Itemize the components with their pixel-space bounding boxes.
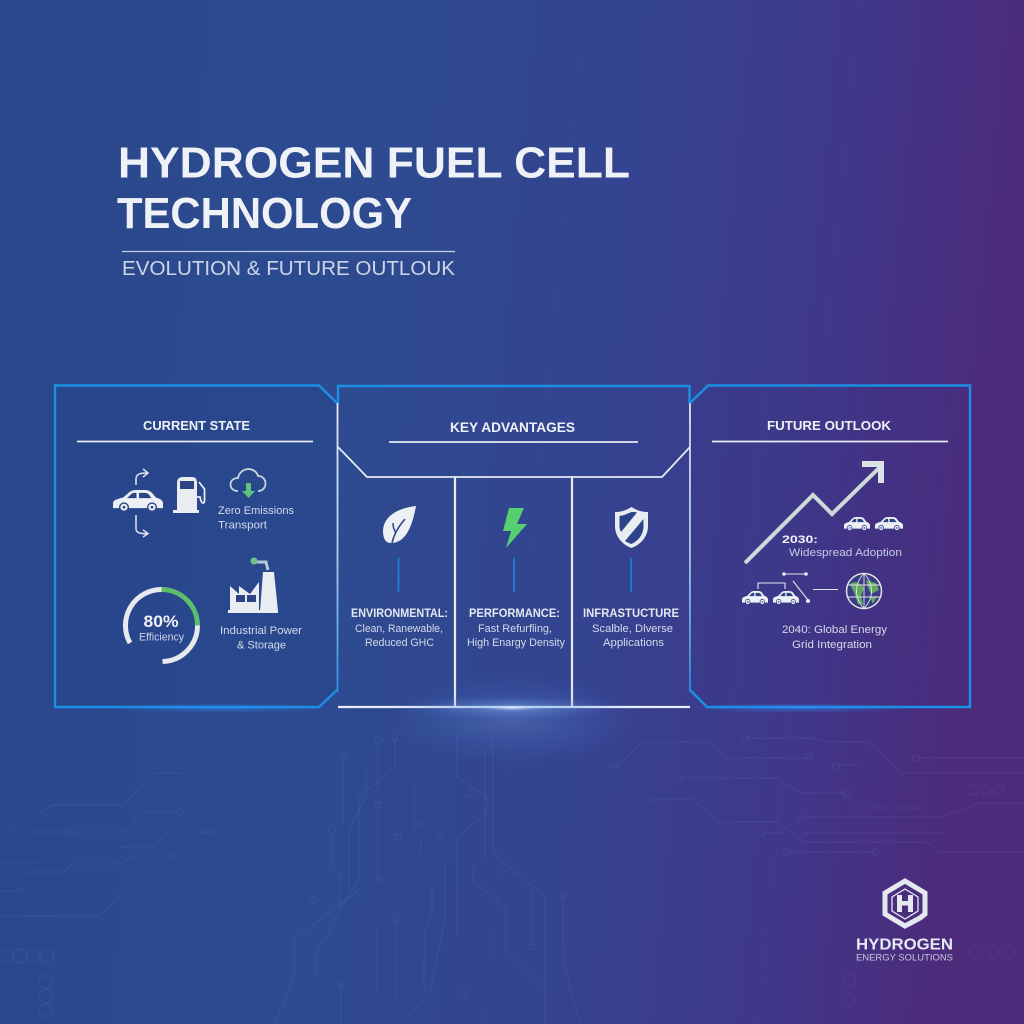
column: performance: Fast Refurfling, — [478, 623, 552, 635]
logo: hydrogen energy solutions — [856, 881, 953, 964]
text: industrial power and storage: Industrial Power — [220, 625, 302, 637]
text: zero emissions transport: Zero Emissions — [218, 505, 295, 517]
column: environmental — [351, 506, 448, 649]
circuit board pattern — [0, 733, 1024, 1024]
column: infrastructure: Scalble, Dlverse — [592, 623, 673, 635]
text: industrial power and storage: & Storage — [237, 640, 286, 652]
text: 2040 milestone: Grid Integration — [792, 639, 872, 651]
column: performance — [467, 508, 565, 649]
logo wordmark: HYDROGEN — [856, 936, 953, 954]
chart: rising arrow — [745, 461, 884, 563]
column: environmental: ENVIRONMENTAL: — [351, 606, 448, 620]
glow under panels — [110, 675, 910, 765]
heading rule — [389, 441, 638, 443]
icon: two cars upper — [844, 517, 903, 531]
icon: fuel pump — [173, 477, 205, 513]
icon: globe — [846, 574, 882, 608]
title — [117, 138, 630, 238]
column: infrastructure: Applications — [603, 637, 664, 649]
heading: current state: CURRENT STATE — [143, 418, 250, 433]
text: 2040 milestone — [782, 624, 888, 651]
panel: key advantages — [338, 386, 690, 707]
column: performance: High Enargy Density — [467, 637, 565, 649]
logo tagline: ENERGY SOLUTIONS — [856, 952, 953, 964]
panel: future outlook — [690, 386, 970, 707]
text: zero emissions transport: Transport — [218, 520, 267, 532]
text: 2030 milestone: Widespread Adoption — [789, 547, 902, 559]
text: 2040 milestone: 2040: Global Energy — [782, 624, 888, 636]
column: infrastructure — [583, 507, 679, 649]
gauge: 80% efficiency: Efficiency — [139, 632, 184, 644]
heading: key advantages: KEY ADVANTAGES — [450, 420, 575, 435]
heading rule — [77, 440, 313, 442]
gauge: 80% efficiency — [125, 590, 198, 662]
column: environmental: Clean, Ranewable, — [355, 623, 443, 635]
title rule and subtitle: EVOLUTION & FUTURE OUTLOUK — [122, 258, 456, 280]
icon: car with arrows — [113, 469, 163, 537]
column: environmental: Reduced GHC — [365, 637, 434, 649]
text: 2030 milestone: 2030: — [782, 534, 818, 546]
gauge: 80% efficiency: 80% — [144, 613, 179, 631]
text: 2030 milestone — [782, 534, 902, 559]
panel frame — [338, 403, 690, 707]
title: HYDROGEN FUEL CELL — [118, 138, 630, 188]
panel: current state — [55, 386, 337, 707]
heading: future outlook: FUTURE OUTLOOK — [767, 418, 892, 433]
icon: connected cars — [742, 572, 838, 605]
text: zero emissions transport — [218, 505, 295, 532]
icon: cloud with arrow — [230, 469, 266, 498]
title: TECHNOLOGY — [117, 189, 412, 238]
icon: factory — [228, 558, 278, 613]
column: performance: PERFORMANCE: — [469, 606, 560, 620]
icon: hexagon H — [885, 881, 925, 926]
text: industrial power and storage — [220, 625, 302, 652]
column: infrastructure: INFRASTUCTURE — [583, 606, 679, 620]
heading rule — [712, 440, 948, 442]
